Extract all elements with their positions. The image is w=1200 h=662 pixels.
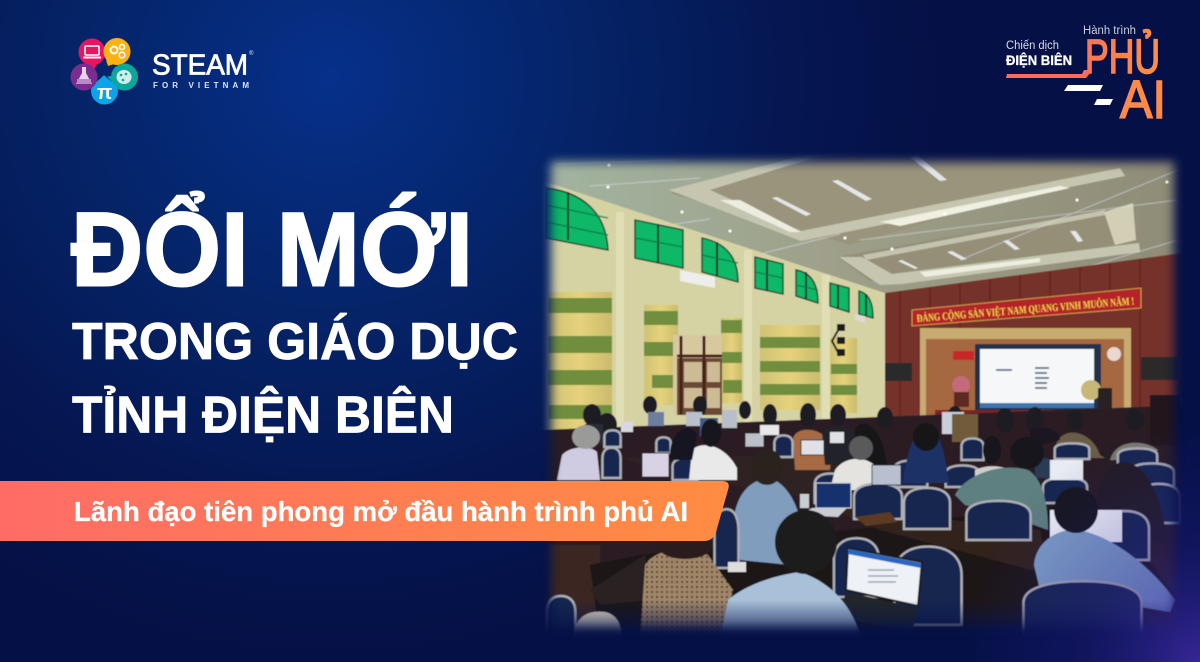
speaker bbox=[832, 324, 845, 356]
logo: Chiến dịch Điện Biên, Hành trình phủ AI: Chiến dịch bbox=[1006, 40, 1059, 52]
heading line 1: ĐỔI MỚI bbox=[71, 190, 473, 308]
icon: teal palette bbox=[107, 64, 138, 90]
middle-row chairs bbox=[602, 430, 1180, 523]
door bbox=[673, 335, 722, 415]
logo: Chiến dịch Điện Biên, Hành trình phủ AI: PHỦ bbox=[1085, 29, 1160, 84]
logo: Chiến dịch Điện Biên, Hành trình phủ AI bbox=[1006, 25, 1166, 130]
ceiling bbox=[540, 150, 1190, 300]
purple glow bbox=[960, 422, 1200, 662]
logo: STEAM for Vietnam bbox=[70, 38, 254, 104]
logo: Chiến dịch Điện Biên, Hành trình phủ AI: ĐIỆN BIÊN bbox=[1006, 53, 1072, 68]
icon: orange gears bbox=[104, 38, 130, 66]
stage bbox=[884, 327, 1178, 416]
back rows of audience bbox=[583, 395, 1180, 470]
laptops bbox=[621, 422, 1083, 517]
icon: pink laptop bbox=[78, 38, 106, 70]
front laptop bbox=[838, 548, 922, 632]
logo: Chiến dịch Điện Biên, Hành trình phủ AI: AI bbox=[1120, 70, 1166, 130]
front-row people bbox=[733, 437, 1175, 612]
cream chair cover and lady bbox=[575, 547, 734, 633]
logo: Chiến dịch Điện Biên, Hành trình phủ AI: Hành trình bbox=[1083, 25, 1136, 37]
near-row chairs bbox=[854, 484, 1149, 560]
wordmark: ® bbox=[249, 50, 254, 57]
green windows bbox=[546, 188, 873, 318]
subtitle banner: Lãnh đạo tiên phong mở đầu hành trình phủ AI bbox=[74, 496, 688, 527]
photo: conference room bbox=[540, 150, 1190, 640]
phones and hands bbox=[728, 494, 897, 572]
seated people mid row bbox=[556, 418, 1165, 526]
icon: purple flask bbox=[70, 64, 98, 90]
title bbox=[71, 190, 518, 444]
wordmark: STEAM bbox=[152, 50, 248, 82]
heading line 2: TRONG GIÁO DỤC bbox=[72, 313, 518, 371]
subtitle banner bbox=[0, 481, 729, 541]
icon: blue pi: π bbox=[97, 82, 112, 104]
air conditioners bbox=[680, 270, 715, 288]
icon: blue pi bbox=[91, 75, 118, 104]
curtains bbox=[548, 292, 857, 432]
bottom-right fade bbox=[546, 602, 1171, 636]
heading line 3: TỈNH ĐIỆN BIÊN bbox=[72, 386, 454, 444]
front man bbox=[720, 510, 862, 640]
audience floor and tables bbox=[540, 405, 1190, 640]
right wall bbox=[884, 254, 1181, 418]
wordmark: FOR VIETNAM bbox=[153, 81, 249, 90]
left wall bbox=[543, 182, 886, 430]
front-row chairs bbox=[547, 501, 1142, 640]
